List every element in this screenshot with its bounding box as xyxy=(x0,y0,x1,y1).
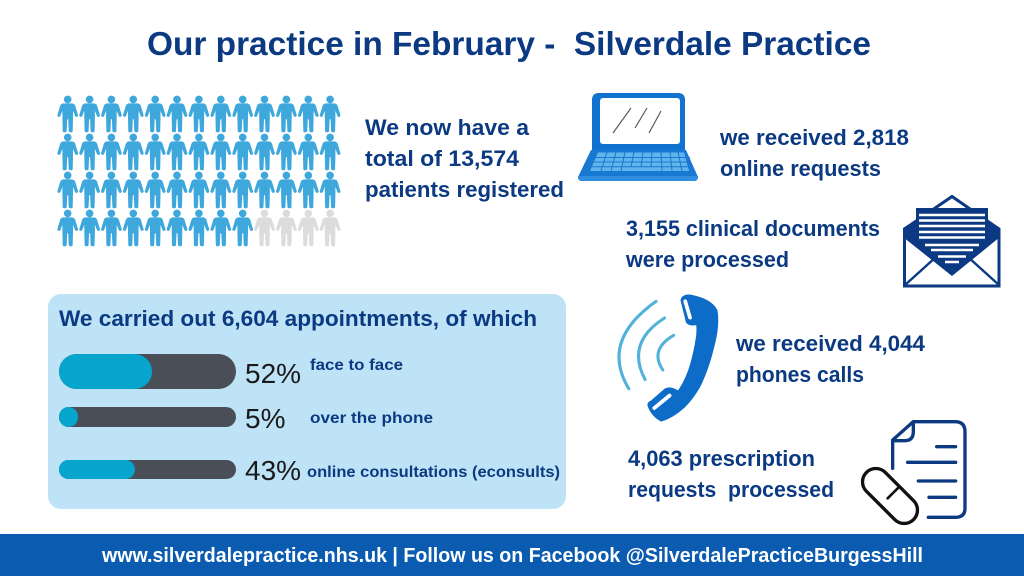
panel: appointments xyxy=(48,294,566,509)
icon: prescription document and pill xyxy=(857,422,965,529)
text: patients registered: We now have a xyxy=(365,115,530,140)
bar: face to face: face to face xyxy=(310,357,403,374)
bar: over the phone: 5% xyxy=(245,403,285,434)
bar: face to face: 52% xyxy=(245,358,301,389)
text: phone calls xyxy=(735,331,926,387)
text: clinical documents xyxy=(625,216,880,272)
footer banner: www.silverdalepractice.nhs.uk | Follow us on Facebook @SilverdalePracticeBurgessHill xyxy=(101,545,923,567)
icon: laptop xyxy=(578,93,698,181)
panel heading: We carried out 6,604 appointments, of which xyxy=(59,306,537,331)
text: prescription requests xyxy=(628,446,834,502)
text: online requests: we received 2,818 xyxy=(719,125,909,150)
footer banner xyxy=(0,534,1024,576)
bar: online consultations: 43% xyxy=(245,455,301,486)
bar: online consultations xyxy=(59,455,560,486)
bar: over the phone xyxy=(59,403,433,434)
text: online requests xyxy=(719,125,909,181)
text: phone calls: we received 4,044 xyxy=(735,331,926,356)
text: patients registered: total of 13,574 xyxy=(365,146,520,171)
icon: telephone xyxy=(619,294,718,422)
pictogram: patients registered xyxy=(57,96,340,246)
bar: online consultations: online consultations (econsults) xyxy=(307,464,560,481)
text: online requests: online requests xyxy=(720,156,881,181)
text: clinical documents: were processed xyxy=(625,247,789,272)
text: phone calls: phones calls xyxy=(736,362,864,387)
bar: face to face xyxy=(59,354,403,389)
title: Our practice in February - Silverdale Practice xyxy=(147,25,871,62)
text: patients registered: patients registered xyxy=(365,177,564,202)
text: prescription requests: requests processed xyxy=(628,477,834,502)
text: clinical documents: 3,155 clinical documents xyxy=(626,216,880,241)
text: patients registered xyxy=(365,115,564,202)
icon: open envelope xyxy=(903,196,1000,286)
text: prescription requests: 4,063 prescription xyxy=(628,446,815,471)
bar: over the phone: over the phone xyxy=(310,410,433,427)
